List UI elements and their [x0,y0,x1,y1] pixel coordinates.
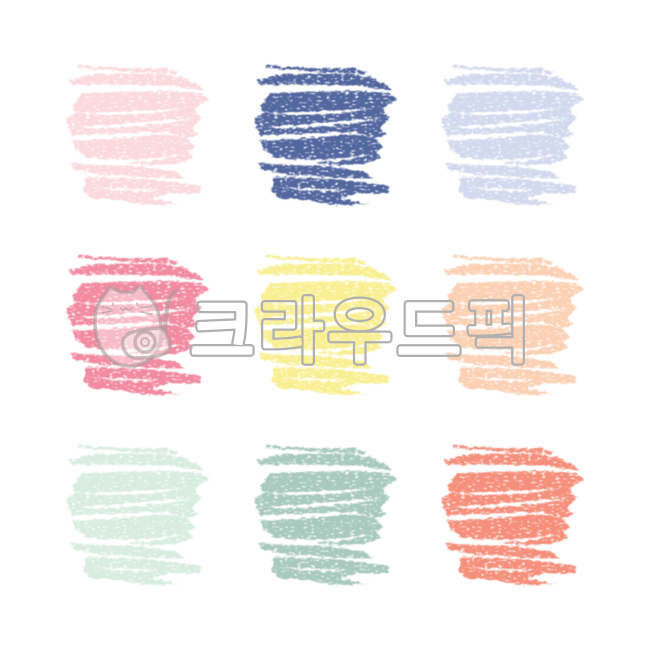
icon: watermark cat with camera [95,287,176,366]
watermark wordmark: 크라우드픽 [190,293,530,371]
swatch: pale pink [67,65,209,205]
swatch: coral [442,445,584,585]
swatch: sage [255,445,397,585]
swatch: yellow [255,255,397,395]
swatch: lavender [442,65,584,205]
swatch: navy [255,65,397,205]
swatch: rose [67,255,209,395]
swatch: pale mint [67,445,209,585]
swatch: peach [442,255,584,395]
